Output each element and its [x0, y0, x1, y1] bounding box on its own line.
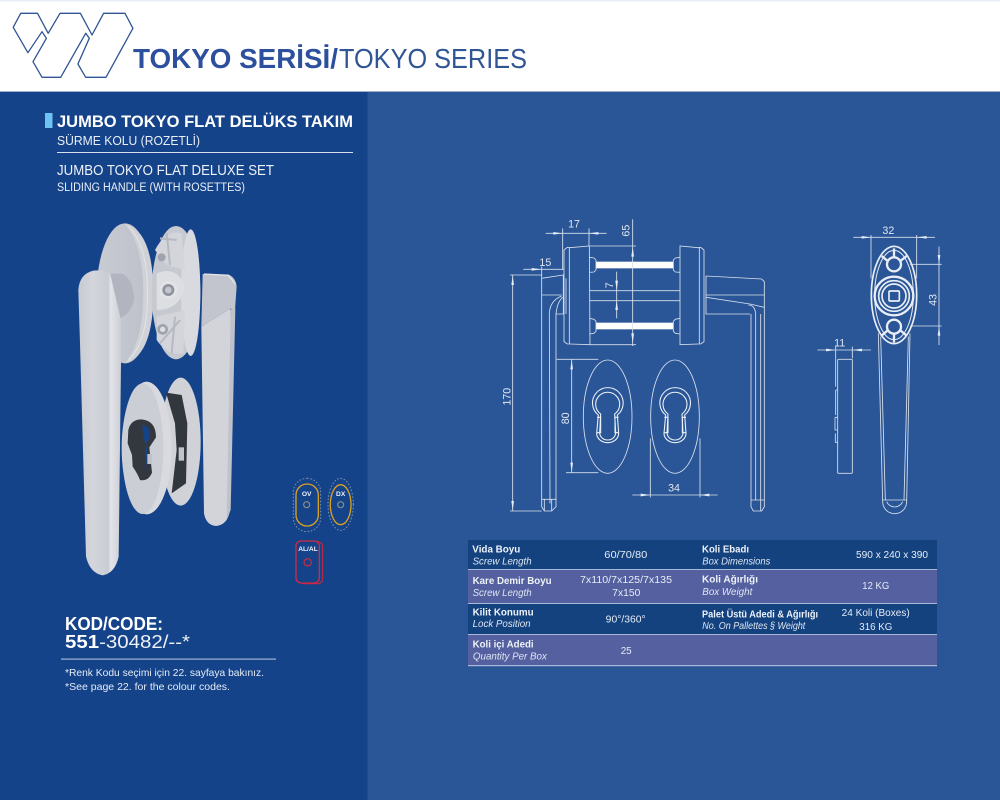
- left rosette outline: [564, 246, 590, 345]
- row: quantity per box: [473, 640, 632, 663]
- icon: AL/AL rosette: AL/AL: [298, 546, 318, 553]
- row: box dimensions: Koli Ebadı: [702, 544, 749, 556]
- lever front outline: [878, 333, 910, 514]
- dimension 43: [910, 247, 942, 345]
- lock rosette right: [651, 360, 699, 473]
- heading: product name turkish: JUMBO TOKYO FLAT DELÜKS TAKIM: [57, 112, 353, 131]
- left lever: [78, 270, 134, 575]
- dimension 34: 34: [668, 482, 680, 494]
- panel: left product panel: [0, 92, 368, 800]
- spindle lines: [589, 291, 680, 301]
- icon: logo: [13, 13, 133, 77]
- dimension 32: 32: [882, 225, 894, 237]
- colour code notes: *See page 22. for the colour codes.: [65, 681, 230, 693]
- heading marker: [45, 113, 52, 128]
- colour code notes: *Renk Kodu seçimi için 22. sayfaya bakınız.: [65, 667, 264, 679]
- row: lock position: Kilit Konumu: [473, 608, 534, 619]
- title: english: TOKYO SERIES: [339, 43, 527, 74]
- right lever: [201, 274, 237, 526]
- subheading: english: SLIDING HANDLE (WITH ROSETTES): [57, 182, 245, 194]
- technical drawing: side view: [501, 219, 764, 511]
- dimension 32: [853, 225, 935, 278]
- dimension 65: [590, 219, 636, 346]
- dimension 170: [501, 275, 542, 511]
- dimension 11: [817, 337, 871, 358]
- dimension 34: [632, 438, 718, 497]
- colour option icons: [293, 478, 353, 584]
- dimension 17: 17: [568, 219, 580, 231]
- left handle outline: [542, 275, 566, 511]
- header band: [0, 0, 1000, 92]
- title: TOKYO SERİSİ/: [133, 43, 338, 74]
- icon: DX rosette: DX: [336, 491, 346, 498]
- row: box dimensions: [702, 544, 928, 568]
- back rosette: [97, 223, 153, 363]
- dimension 43: 43: [927, 294, 939, 306]
- row: box weight: Box Weight: [702, 587, 753, 598]
- dimension 7: 7: [604, 282, 616, 288]
- end profile: [835, 358, 852, 473]
- right rosette outline: [680, 246, 704, 345]
- table rows: [468, 540, 937, 666]
- row: lock position: Lock Position: [473, 619, 531, 630]
- row: pallet quantity and weight: [702, 608, 910, 633]
- row: square bar length: 7x150: [612, 588, 641, 599]
- dimension 15: [523, 257, 563, 278]
- product code: [65, 613, 190, 652]
- dimension 11: 11: [834, 337, 845, 349]
- row: pallet quantity and weight: No. On Pallettes § Weight: [702, 621, 806, 632]
- dimension 80: 80: [560, 412, 572, 424]
- row: square bar length: 7x110/7x125/7x135: [580, 575, 672, 586]
- dimension 80: [557, 359, 598, 473]
- dimension 170: 170: [501, 388, 513, 406]
- row: square bar length: [473, 575, 672, 599]
- technical drawing: front and end view: [817, 225, 942, 514]
- screws: [589, 257, 680, 334]
- row: box dimensions: Box Dimensions: [702, 556, 770, 568]
- product photo: handle set: [78, 223, 237, 575]
- product code: 551-30482/--*: [65, 631, 190, 652]
- product code: KOD/CODE:: [65, 613, 163, 634]
- row: screw length: Vida Boyu: [472, 544, 520, 556]
- lower front rosette: [122, 382, 172, 514]
- row: quantity per box: Koli içi Adedi: [473, 640, 534, 651]
- row: screw length: [472, 544, 648, 568]
- row: screw length: Screw Length: [473, 556, 532, 568]
- row: quantity per box: Quantity Per Box: [473, 652, 548, 663]
- panel: right technical panel: [368, 92, 1000, 800]
- row: pallet quantity and weight: Palet Üstü Adedi & Ağırlığı: [702, 608, 818, 621]
- row: lock position: 90°/360°: [606, 615, 646, 626]
- heading: product name english: JUMBO TOKYO FLAT DELUXE SET: [57, 162, 274, 179]
- specification table: [468, 540, 937, 666]
- rosette with mounting detail: [871, 246, 917, 344]
- row: screw length: 60/70/80: [604, 550, 648, 561]
- dimension 15: 15: [539, 257, 551, 269]
- dimension 65: 65: [621, 225, 633, 237]
- lock rosette left: [583, 360, 632, 473]
- dimension 17: [546, 219, 607, 270]
- subheading: turkish: SÜRME KOLU (ROZETLİ): [57, 133, 200, 148]
- row: box weight: 12 KG: [862, 581, 890, 592]
- lower back rosette: [161, 378, 201, 506]
- row: square bar length: Kare Demir Boyu: [473, 576, 552, 587]
- right handle outline: [706, 276, 764, 511]
- row: box weight: [702, 575, 890, 598]
- row: pallet quantity and weight: 316 KG: [859, 622, 893, 633]
- row: pallet quantity and weight: 24 Koli (Boxes): [842, 608, 910, 619]
- row: quantity per box: 25: [621, 646, 632, 657]
- cylinder cut-out: [128, 419, 156, 480]
- mounting plate: [152, 226, 200, 359]
- row: box weight: Koli Ağırlığı: [702, 575, 758, 586]
- dimension 7: [604, 272, 618, 318]
- row: square bar length: Screw Length: [473, 588, 532, 599]
- icon: OV rosette: OV: [302, 491, 312, 498]
- heading block: [45, 112, 353, 194]
- row: box dimensions: 590 x 240 x 390: [856, 550, 928, 561]
- row: lock position: [473, 608, 646, 630]
- colour code notes: [65, 667, 264, 693]
